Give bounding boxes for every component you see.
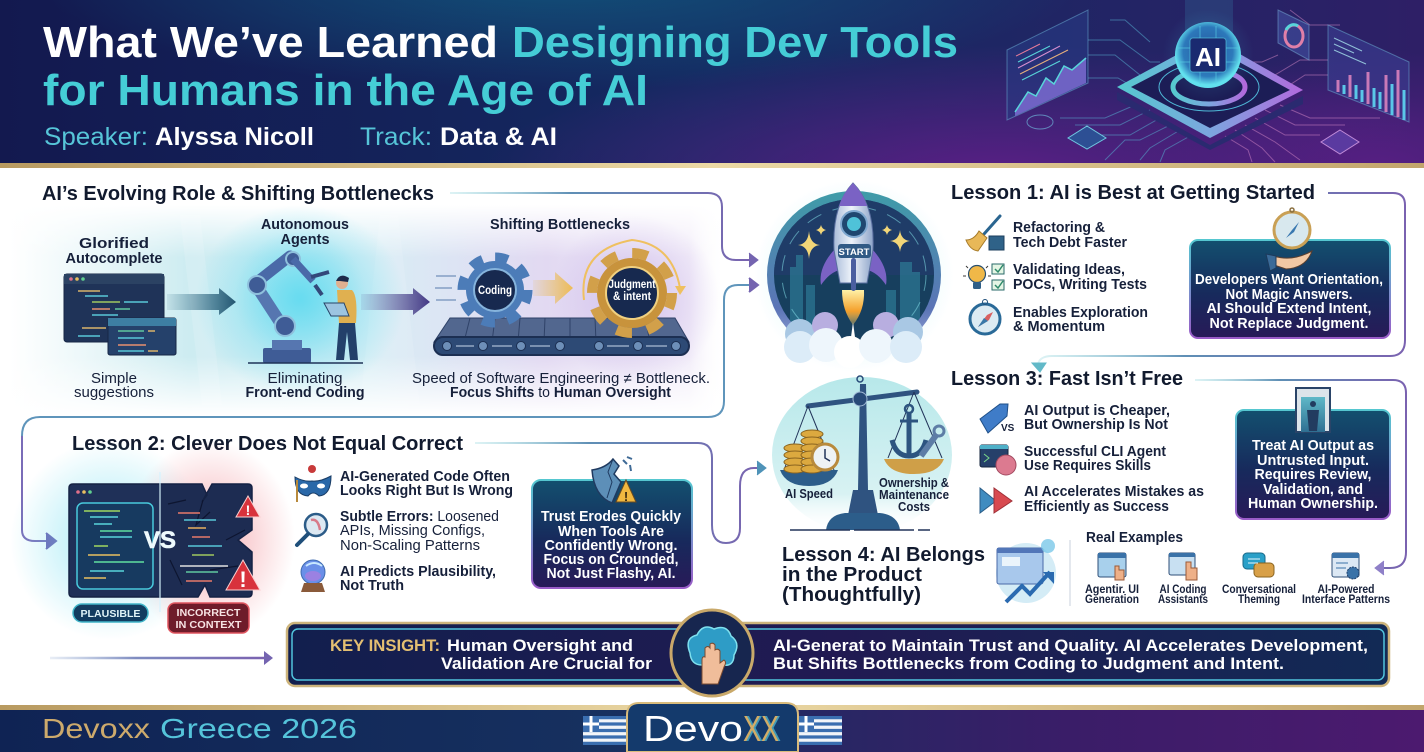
icon: judgment gear: [583, 240, 686, 333]
lesson 4 heading: [782, 543, 985, 606]
icon: robot arm and developer: [248, 252, 363, 363]
icon: magnifier: [297, 514, 327, 545]
example: ai powered interface patterns: [1302, 553, 1390, 606]
callout: trust erodes: Not Just Flashy, AI.: [546, 565, 676, 582]
stage: autonomous agents: Autonomous: [261, 217, 349, 233]
illustration: rocket launch circle: [767, 182, 941, 363]
icon: bulb and checks: [963, 264, 1004, 290]
code window: plausible side: [69, 484, 160, 597]
icon: price tag versus: VS: [1001, 423, 1015, 434]
callout: trust erodes: Confidently Wrong.: [544, 537, 678, 554]
lesson 2 items: [295, 465, 513, 594]
callout: trust erodes: When Tools Are: [558, 523, 664, 540]
lesson 4 heading: in the Product: [782, 563, 922, 586]
stage: glorified autocomplete: Autocomplete: [66, 251, 162, 267]
speaker and track line: Data & AI: [440, 123, 557, 151]
example: agentic ui generation: [1085, 553, 1139, 606]
icon: broom and code: [966, 216, 1004, 251]
pill: incorrect in context: [168, 603, 249, 633]
small circuit chips: [1027, 115, 1359, 154]
key insight banner: Validation Are Crucial for: [441, 655, 653, 673]
lesson 1 items: Refactoring &: [1013, 219, 1105, 236]
key insight banner: Human Oversight and: [447, 637, 633, 655]
illustration: balance scale: [772, 376, 952, 533]
lesson 3 items: AI Accelerates Mistakes as: [1024, 483, 1204, 500]
icon: fast-forward arrows: [980, 488, 1012, 513]
logo: Devoxx: XX: [743, 708, 779, 749]
connector: heading to rocket: [450, 193, 758, 267]
speaker and track line: [44, 123, 557, 151]
illustration: balance scale: Ownership &: [879, 476, 949, 490]
lesson 1 items: Tech Debt Faster: [1013, 234, 1127, 251]
central chip platform: [1117, 0, 1303, 150]
arrow: coding to judgment: [533, 272, 573, 304]
stage: autonomous agents: Front-end Coding: [246, 385, 364, 401]
lesson 3 heading: Lesson 3: Fast Isn’t Free: [951, 368, 1183, 390]
lesson 2 items: Non-Scaling Patterns: [340, 537, 480, 554]
lesson 2 items: AI Predicts Plausibility,: [340, 563, 496, 580]
illustration: balance scale: Costs: [898, 500, 930, 514]
header illustration: AI chip with dashboards: [1007, 0, 1409, 162]
left dashboard panel: [1007, 10, 1088, 120]
stage: glorified autocomplete: [64, 236, 176, 401]
stage: glorified autocomplete: suggestions: [74, 385, 154, 401]
callout: orientation: AI Should Extend Intent,: [1206, 300, 1372, 317]
header banner: [0, 0, 1424, 168]
stage: shifting bottlenecks: [412, 217, 710, 401]
example: conversational theming: Conversational: [1222, 584, 1296, 596]
plausible versus incorrect comparison: [10, 440, 295, 640]
pill: incorrect in context: IN CONTEXT: [176, 619, 242, 631]
callout: untrusted input: [1236, 388, 1390, 519]
icon: security scanner gate: [1296, 388, 1330, 432]
section heading: evolving role: AI’s Evolving Role & Shifting Bottlenecks: [42, 183, 434, 205]
icon: judgment gear: Judgment: [608, 279, 656, 291]
rocket body: [821, 183, 886, 291]
speaker and track line: Track:: [360, 123, 432, 151]
icon: broken shield with warning: !: [624, 489, 628, 504]
lesson 1 heading: Lesson 1: AI is Best at Getting Started: [951, 182, 1315, 204]
event name: [42, 713, 357, 744]
lesson 2 heading: Lesson 2: Clever Does Not Equal Correct: [72, 433, 463, 455]
connector: lesson 1 to lesson 3: [1032, 193, 1405, 372]
logo: Devoxx: Devo: [643, 708, 743, 749]
logo: Devoxx: [627, 703, 798, 752]
callout: orientation: Developers Want Orientation,: [1195, 271, 1383, 288]
flag: Greece right: [798, 716, 842, 745]
code window: cracked incorrect side: !: [246, 502, 250, 518]
connector: lesson 2 to balance scale: [475, 443, 766, 543]
lesson 2 items: Not Truth: [340, 577, 404, 594]
real examples: Real Examples: [1086, 529, 1183, 546]
icon: mask: [295, 465, 331, 502]
illustration: balance scale: AI Speed: [785, 487, 833, 501]
lesson 1 items: POCs, Writing Tests: [1013, 276, 1147, 293]
example: ai coding assistants: [1158, 553, 1208, 606]
icon: coding gear: [435, 257, 528, 323]
lesson 3 items: [980, 402, 1204, 515]
event name: Devoxx: [42, 713, 150, 744]
callout: trust erodes: Trust Erodes Quickly: [541, 508, 682, 525]
flag: Greece left: [583, 716, 627, 745]
stage: shifting bottlenecks: Speed of Software Engineering ≠ Bottleneck.: [412, 371, 710, 387]
lesson 4 heading: Lesson 4: AI Belongs: [782, 543, 985, 566]
key insight banner: KEY INSIGHT:: [330, 637, 440, 655]
rocket exhaust clouds: [784, 312, 923, 368]
real examples: [1070, 529, 1390, 606]
key insight banner: But Shifts Bottlenecks from Coding to Judgment and Intent.: [773, 655, 1284, 673]
callout: untrusted input: Untrusted Input.: [1257, 452, 1369, 469]
lesson 3 items: Efficiently as Success: [1024, 498, 1169, 515]
icon: coins and clock: [784, 430, 838, 473]
callout: untrusted input: Requires Review,: [1254, 466, 1372, 483]
key insight banner: [287, 610, 1389, 696]
connector: lesson 3 to real examples: [1195, 380, 1406, 575]
small donut panel: [1278, 10, 1309, 60]
lesson 1 items: [963, 216, 1148, 335]
example: agentic ui generation: Generation: [1085, 594, 1139, 606]
callout: orientation: Not Magic Answers.: [1226, 286, 1352, 303]
connector: section one to rocket and lesson two: [22, 278, 758, 549]
key insight banner: AI-Generat to Maintain Trust and Quality. AI Accelerates Development,: [773, 637, 1368, 655]
lesson 2 items: Looks Right But Is Wrong: [340, 482, 513, 499]
arrow: agents to bottlenecks: [361, 288, 430, 315]
icon: anchor and wrench: [892, 405, 944, 456]
example: ai coding assistants: Assistants: [1158, 594, 1208, 606]
title: [43, 18, 958, 115]
event name: Greece 2026: [160, 713, 357, 744]
example: ai powered interface patterns: AI-Powered: [1318, 584, 1374, 596]
lesson 2 items: AI-Generated Code Often: [340, 468, 510, 485]
stage: autonomous agents: Agents: [280, 232, 330, 248]
icon: conveyor belt: [434, 318, 689, 355]
code window: cracked incorrect side: [160, 484, 260, 597]
central chip platform: AI: [1195, 42, 1221, 72]
rocket body: START: [839, 247, 870, 258]
lesson 1 items: & Momentum: [1013, 318, 1105, 335]
icon: terminal and brain: [980, 445, 1016, 475]
icon: price tag versus: [980, 404, 1015, 434]
callout: trust erodes: [532, 457, 692, 588]
example: ai coding assistants: AI Coding: [1160, 584, 1206, 596]
stage: glorified autocomplete: Simple: [91, 371, 137, 387]
rocket flame: [842, 290, 864, 325]
example: agentic ui generation: Agentir. UI: [1085, 584, 1139, 596]
icon: broken shield with warning: [592, 457, 636, 504]
example: conversational theming: [1222, 553, 1296, 606]
icon: crystal ball: [301, 560, 325, 592]
pill: plausible: [73, 604, 148, 622]
icon: code editor windows: [64, 274, 176, 355]
callout: trust erodes: Focus on Crounded,: [544, 551, 678, 568]
callout: untrusted input: Treat AI Output as: [1252, 437, 1374, 454]
callout: untrusted input: Human Ownership.: [1248, 495, 1378, 512]
illustration: balance scale: Maintenance: [879, 488, 949, 502]
lesson 3 items: AI Output is Cheaper,: [1024, 402, 1170, 419]
icon: compass: [970, 300, 1000, 334]
caption: focus shifts: Focus Shifts to Human Oversight: [450, 385, 671, 401]
speaker and track line: Speaker:: [44, 123, 148, 151]
lesson 4 heading: (Thoughtfully): [782, 583, 921, 606]
right chart panel: [1328, 25, 1409, 122]
icon: product interface with growth arrow: [996, 539, 1056, 603]
stage: autonomous agents: [246, 217, 364, 401]
panel background: evolving role glow: [0, 205, 735, 415]
callout: orientation: [1190, 208, 1390, 338]
example: conversational theming: Theming: [1238, 594, 1280, 606]
icon: brain and hand: [671, 610, 753, 696]
stage: shifting bottlenecks: Shifting Bottlenecks: [490, 217, 630, 233]
lesson 3 items: But Ownership Is Not: [1024, 416, 1168, 433]
title: for Humans in the Age of AI: [43, 66, 648, 115]
callout: untrusted input: Validation, and: [1263, 481, 1363, 498]
title: Designing Dev Tools: [512, 18, 958, 67]
logo: Devoxx: XX: [745, 708, 781, 749]
icon: judgment gear: & intent: [613, 291, 651, 303]
lesson 3 items: Use Requires Skills: [1024, 457, 1151, 474]
example: ai powered interface patterns: Interface Patterns: [1302, 594, 1390, 606]
arrow: autocomplete to agents: [167, 288, 236, 315]
pill: incorrect in context: INCORRECT: [176, 607, 241, 619]
callout: orientation: Not Replace Judgment.: [1210, 315, 1368, 332]
stage: glorified autocomplete: Glorified: [79, 236, 149, 252]
code window: cracked incorrect side: !: [239, 567, 247, 592]
icon: compass in hand: [1266, 208, 1312, 271]
footer bar: [0, 703, 1424, 752]
lesson 2 items: APIs, Missing Configs,: [340, 522, 485, 539]
pill: plausible: PLAUSIBLE: [80, 608, 140, 620]
lesson 1 items: Enables Exploration: [1013, 304, 1148, 321]
lesson 1 items: Validating Ideas,: [1013, 261, 1125, 278]
speaker and track line: Alyssa Nicoll: [155, 123, 314, 151]
stage: autonomous agents: Eliminating: [268, 371, 342, 387]
arrow: to key insight: [50, 651, 273, 665]
icon: coding gear: Coding: [478, 285, 512, 297]
lesson 3 items: Successful CLI Agent: [1024, 443, 1166, 460]
title: What We’ve Learned: [43, 18, 498, 67]
label: vs: VS: [144, 527, 176, 554]
lesson 2 items: Subtle Errors: Loosened: [340, 508, 499, 525]
